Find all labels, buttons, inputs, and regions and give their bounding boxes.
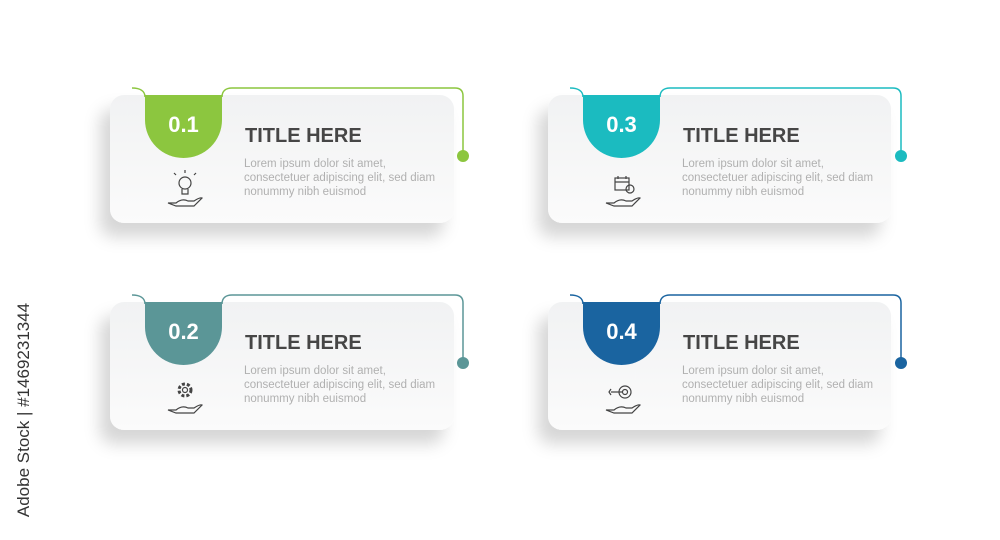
text block: Lorem ipsum dolor sit amet,: [244, 365, 386, 377]
number tab: 0.4: [606, 319, 638, 344]
icon: lightbulb on hand: [168, 170, 202, 206]
number tab: [583, 302, 660, 365]
heading: TITLE HERE: [683, 125, 800, 147]
heading: TITLE HERE: [245, 332, 362, 354]
heading: TITLE HERE: [683, 332, 800, 354]
text block: Lorem ipsum dolor sit amet,: [682, 158, 824, 170]
text block: consectetuer adipiscing elit, sed diam: [682, 379, 873, 391]
number tab: 0.1: [168, 112, 199, 137]
icon: calendar on hand: [606, 176, 640, 206]
text block: consectetuer adipiscing elit, sed diam: [244, 172, 435, 184]
number tab: [145, 302, 222, 365]
text block: nonummy nibh euismod: [682, 393, 804, 405]
text block: consectetuer adipiscing elit, sed diam: [244, 379, 435, 391]
heading: TITLE HERE: [245, 125, 362, 147]
number tab: 0.3: [606, 112, 637, 137]
panel: card 0.4: [548, 295, 907, 430]
text block: Lorem ipsum dolor sit amet,: [244, 158, 386, 170]
icon: gear on hand: [168, 384, 202, 413]
text block: Lorem ipsum dolor sit amet,: [682, 365, 824, 377]
icon: target on hand: [606, 386, 640, 413]
panel: card 0.2: [110, 295, 469, 430]
number tab: 0.2: [168, 319, 199, 344]
text block: consectetuer adipiscing elit, sed diam: [682, 172, 873, 184]
watermark: vertical stock id: Adobe Stock | #1469231344: [14, 303, 33, 517]
number tab: [583, 95, 660, 158]
panel: card 0.3: [548, 88, 907, 223]
text block: nonummy nibh euismod: [244, 186, 366, 198]
text block: nonummy nibh euismod: [682, 186, 804, 198]
number tab: [145, 95, 222, 158]
text block: nonummy nibh euismod: [244, 393, 366, 405]
panel: card 0.1: [110, 88, 469, 223]
